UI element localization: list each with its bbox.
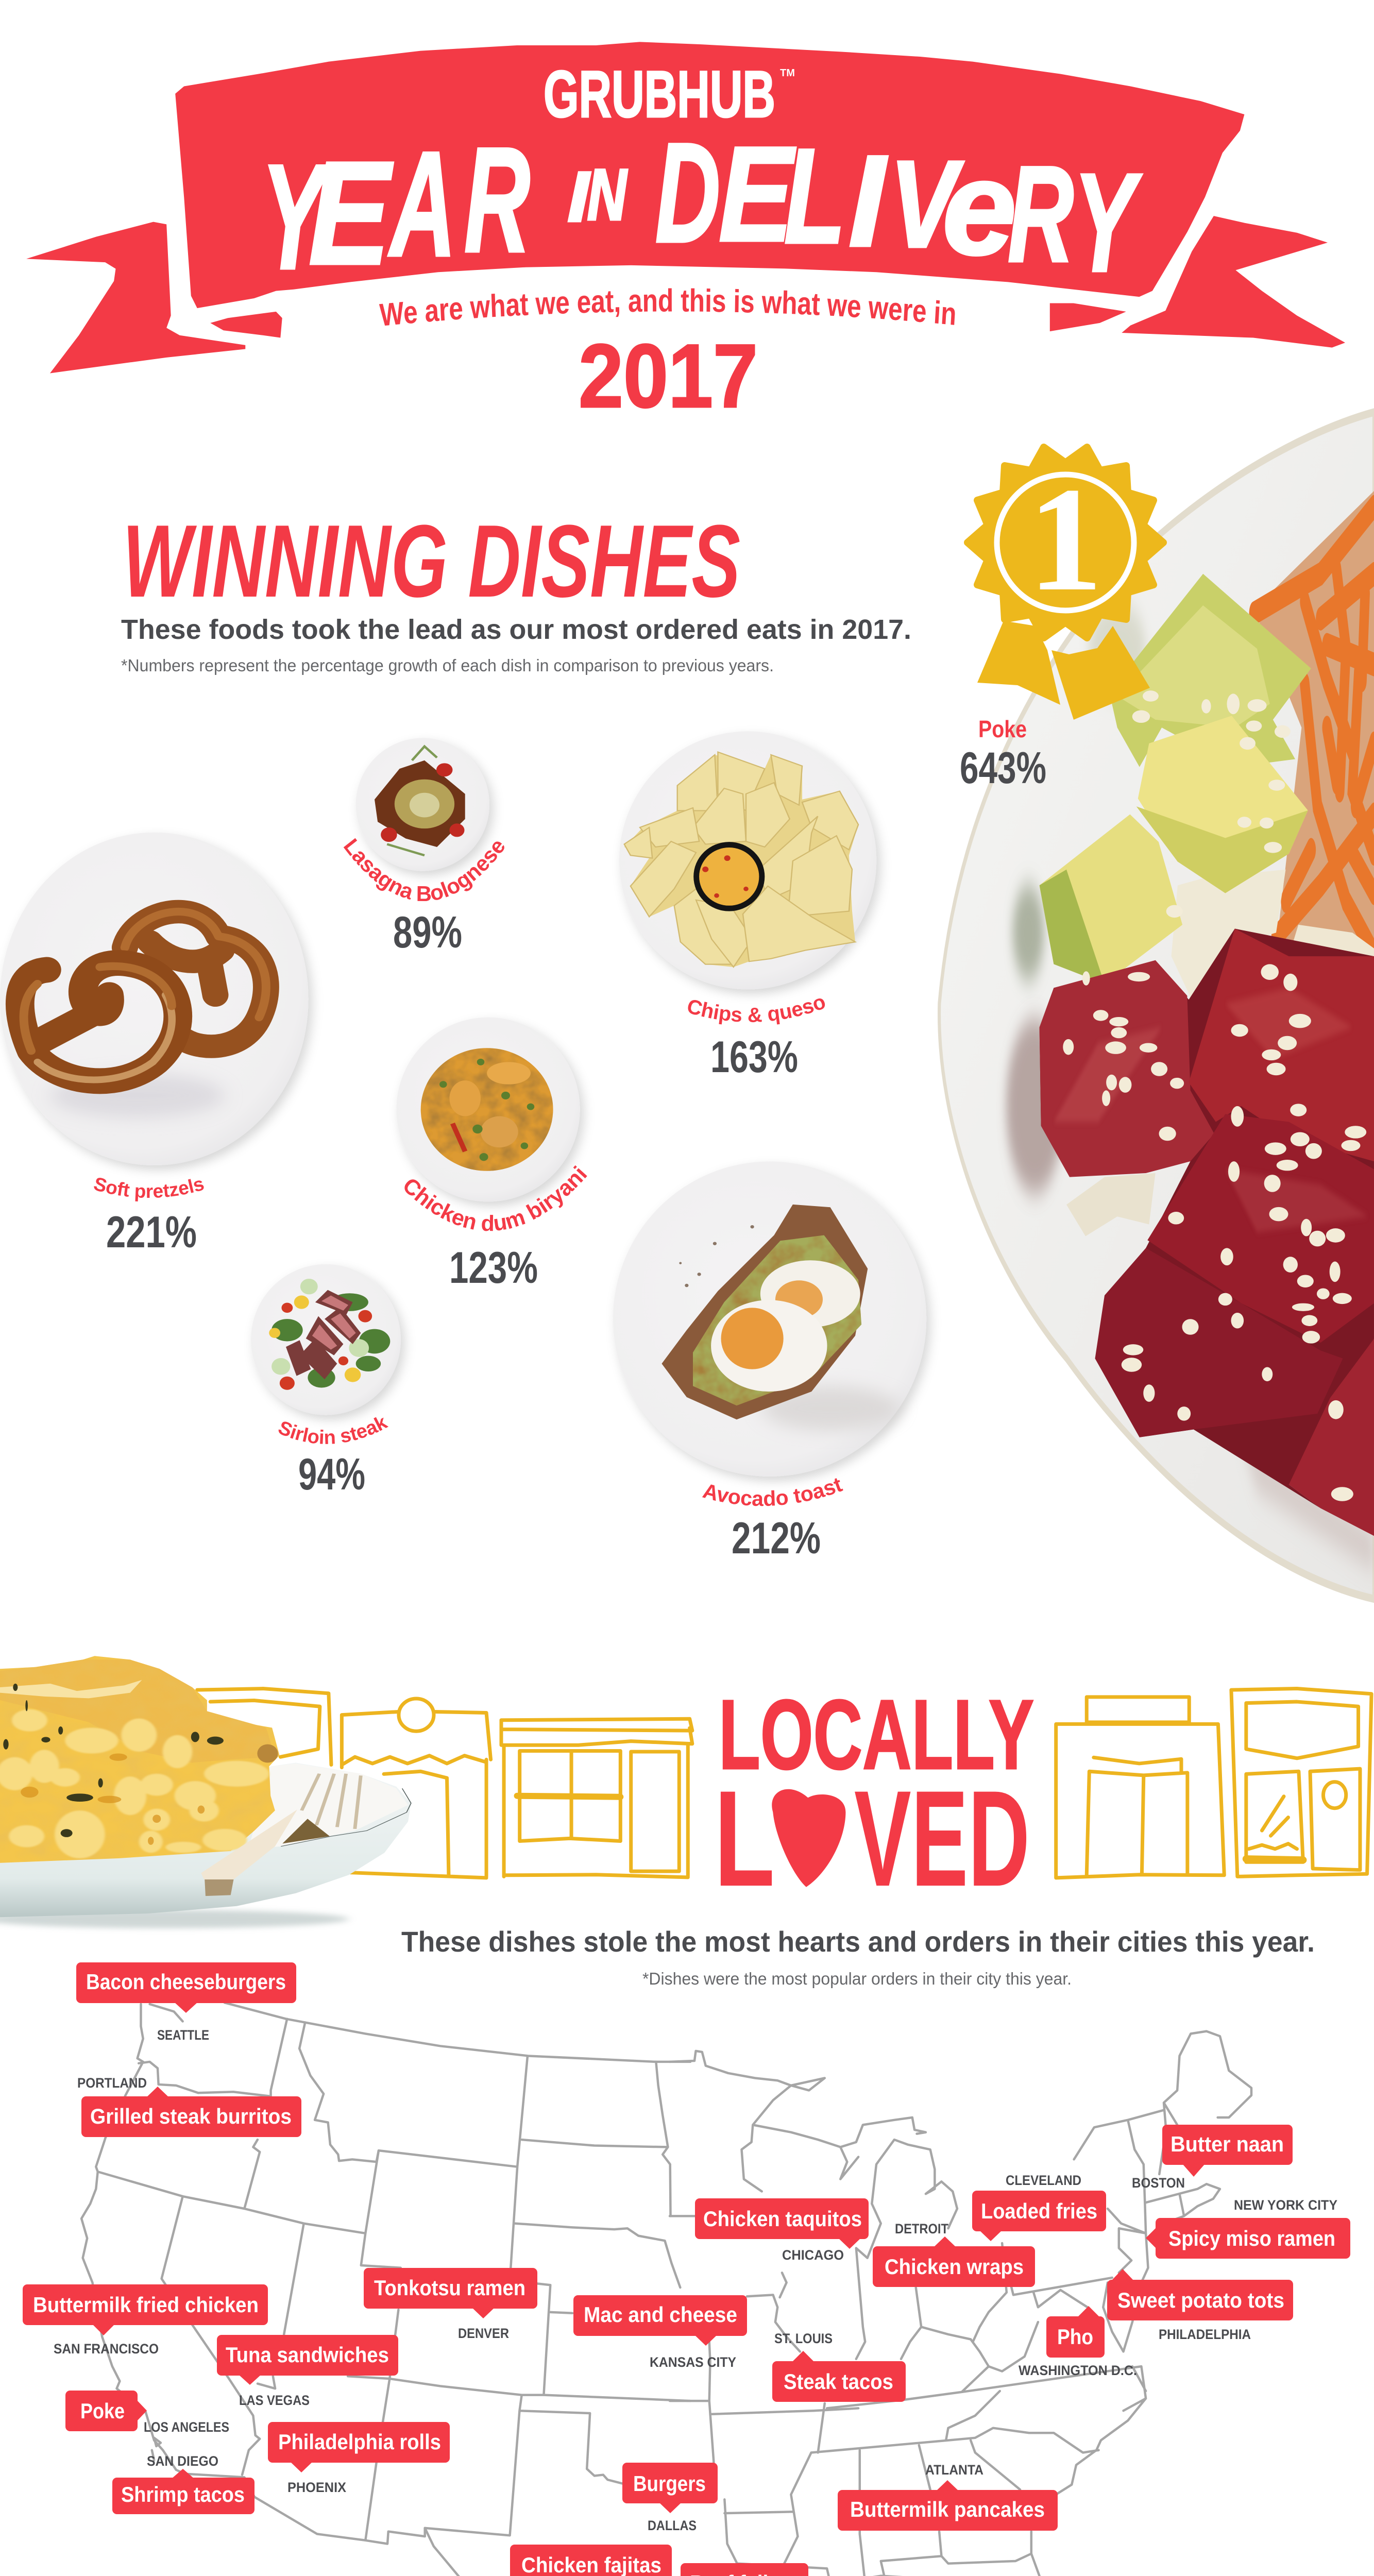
callout: San Francisco: Buttermilk fried chicken	[33, 2293, 259, 2317]
dish: sirloin steak: Sirloin steak	[278, 1417, 388, 1444]
title: Year in Delivery	[261, 114, 1143, 301]
heading: loved with heart: L	[714, 1762, 775, 1915]
dish: soft pretzels: Soft pretzels	[94, 1178, 204, 1201]
panel: locally loved header	[0, 1656, 1371, 1988]
carrots	[1254, 491, 1374, 960]
heading: loved with heart	[714, 1762, 1030, 1915]
storefront illustrations	[197, 1689, 1371, 1878]
year: 2017	[579, 326, 758, 427]
callout: Los Angeles: Poke	[80, 2399, 125, 2423]
dish: lasagna bolognese: Lasagna Bolognese	[343, 838, 504, 901]
bowl	[939, 412, 1374, 1599]
heading: loved with heart: O	[783, 1786, 840, 1884]
title: Year in Delivery: I	[568, 158, 590, 236]
city labels: PHOENIX	[287, 2480, 346, 2495]
callout: Dallas: Burgers	[633, 2471, 706, 2496]
icon: first place medal	[968, 447, 1163, 720]
city labels: SAN FRANCISCO	[54, 2341, 159, 2357]
dish: lasagna bolognese	[343, 738, 504, 957]
map: United States with local favorites	[23, 1962, 1350, 2576]
callout: Seattle	[76, 1962, 296, 2013]
city labels: CLEVELAND	[1006, 2173, 1081, 2188]
fork	[201, 1774, 361, 1896]
dish: poke	[960, 716, 1046, 793]
city labels: PORTLAND	[77, 2075, 147, 2091]
city labels: ATLANTA	[925, 2462, 983, 2478]
callout: Atlanta	[838, 2480, 1058, 2531]
callout: Las Vegas: Tuna sandwiches	[226, 2343, 389, 2367]
callout: St. Louis	[772, 2351, 906, 2402]
dish: chicken dum biryani: 123%	[449, 1243, 538, 1293]
rice	[1172, 870, 1286, 1004]
dish: lasagna bolognese: 89%	[393, 908, 462, 957]
city labels: KANSAS CITY	[650, 2354, 736, 2370]
callout: San Diego	[112, 2469, 255, 2514]
title: Year in Delivery: R	[464, 116, 530, 283]
dish: poke: 643%	[960, 743, 1046, 793]
title: Year in Delivery: D	[655, 114, 720, 272]
callout: Dallas	[622, 2463, 718, 2513]
callout: Washington D.C.: Pho	[1057, 2325, 1093, 2349]
title: Year in Delivery: R	[1008, 138, 1074, 291]
callout: Phoenix: Philadelphia rolls	[278, 2430, 441, 2454]
tagline: We are what we eat, and this is what we were in	[379, 289, 955, 326]
dish: poke: Poke	[978, 716, 1027, 742]
callout: Cleveland	[972, 2191, 1106, 2241]
city labels: NEW YORK CITY	[1234, 2197, 1337, 2213]
callout: Chicago	[695, 2198, 869, 2249]
city labels: PHILADELPHIA	[1159, 2327, 1251, 2342]
city labels: SEATTLE	[157, 2027, 209, 2043]
callout: Los Angeles	[65, 2391, 147, 2431]
photo: mac and cheese bowl	[0, 1656, 411, 1928]
dish: soft pretzels: 221%	[106, 1208, 197, 1257]
title: Year in Delivery: I	[849, 129, 888, 274]
callout: St. Louis: Steak tacos	[784, 2369, 893, 2394]
callout: Atlanta: Buttermilk pancakes	[850, 2497, 1045, 2521]
callout: Portland: Grilled steak burritos	[90, 2104, 292, 2128]
title: Year in Delivery: V	[890, 135, 964, 273]
city labels: CHICAGO	[782, 2247, 844, 2263]
dish: soft pretzels	[0, 833, 316, 1257]
city labels: WASHINGTON D.C.	[1019, 2363, 1137, 2378]
callout: Cleveland: Loaded fries	[981, 2199, 1097, 2223]
title: Year in Delivery: A	[387, 121, 456, 287]
city labels: ST. LOUIS	[774, 2331, 833, 2346]
tuna chunks	[1040, 929, 1374, 1536]
sesame seeds	[1063, 690, 1366, 1501]
callout: New York City	[1146, 2218, 1350, 2259]
panel: winning dishes	[0, 444, 1167, 1563]
city labels: DALLAS	[648, 2518, 697, 2533]
callout: Seattle: Bacon cheeseburgers	[86, 1970, 286, 1994]
callout: San Francisco	[23, 2284, 268, 2335]
callout: Philadelphia	[1107, 2269, 1293, 2320]
callout: Detroit: Chicken wraps	[885, 2255, 1024, 2279]
callout: Kansas City: Mac and cheese	[584, 2302, 737, 2327]
footnote: *Numbers represent the percentage growth of each dish in comparison to previous years.	[121, 656, 774, 675]
heading: winning dishes: WINNING DISHES	[123, 504, 740, 619]
city labels: SAN DIEGO	[147, 2453, 218, 2469]
logo: Grubhub: GRUBHUB	[544, 58, 775, 131]
dish: sirloin steak	[251, 1264, 401, 1499]
title: Year in Delivery: Y	[261, 133, 332, 300]
callout: Chicago: Chicken taquitos	[703, 2207, 862, 2231]
title: Year in Delivery: e	[942, 133, 1016, 283]
subheading: These dishes stole the most hearts and orders in their cities this year.	[401, 1925, 1315, 1958]
callout: Las Vegas	[217, 2335, 398, 2385]
dish: sirloin steak: 94%	[298, 1450, 365, 1499]
city labels	[54, 2027, 1337, 2576]
panel: poke bowl photo	[939, 412, 1374, 1599]
title: Year in Delivery: E	[719, 118, 797, 269]
callout: Philadelphia: Sweet potato tots	[1117, 2288, 1284, 2312]
city labels: DENVER	[458, 2326, 509, 2341]
icon: first place medal: 1	[1028, 456, 1102, 622]
city labels: LOS ANGELES	[144, 2419, 229, 2435]
callout: Boston: Butter naan	[1171, 2132, 1284, 2156]
city labels: BOSTON	[1132, 2175, 1185, 2191]
callout: Denver: Tonkotsu ramen	[374, 2276, 525, 2300]
callout: Washington D.C.	[1046, 2306, 1105, 2358]
callout: Phoenix	[268, 2422, 450, 2472]
footnote: *Dishes were the most popular orders in their city this year.	[642, 1969, 1072, 1988]
title: Year in Delivery: Y	[1074, 144, 1143, 301]
dish: avocado toast: 212%	[732, 1514, 821, 1563]
callout: Kansas City	[573, 2295, 747, 2346]
dish: avocado toast	[613, 1161, 926, 1563]
callout: New York City: Spicy miso ramen	[1168, 2226, 1335, 2250]
heading: locally: LOCALLY	[719, 1679, 1034, 1790]
callout: Portland	[81, 2087, 301, 2137]
dish: chicken dum biryani: Chicken dum biryani	[404, 1165, 587, 1231]
dish: chips and queso	[619, 732, 885, 1082]
callout: Detroit	[873, 2236, 1035, 2287]
logo: Grubhub: TM	[780, 67, 795, 79]
callout: Boston	[1162, 2125, 1293, 2177]
callout: Denver	[364, 2268, 537, 2318]
ribbon shape	[26, 42, 1345, 373]
dish: avocado toast: Avocado toast	[702, 1478, 843, 1506]
dish: chicken dum biryani	[396, 1018, 592, 1293]
city labels: DETROIT	[895, 2221, 948, 2236]
avocado cubes	[1040, 574, 1311, 984]
dish: chips and queso: 163%	[710, 1032, 798, 1082]
dish: chips and queso: Chips & queso	[688, 998, 825, 1024]
callout: San Diego: Shrimp tacos	[121, 2482, 245, 2506]
heading: loved with heart: VED	[854, 1762, 1030, 1915]
subheading: These foods took the lead as our most ordered eats in 2017.	[121, 614, 911, 645]
map outlines	[81, 2003, 1251, 2576]
header banner	[26, 42, 1345, 427]
callout: Austin	[510, 2545, 672, 2576]
title: Year in Delivery: N	[587, 154, 627, 235]
title: Year in Delivery: E	[309, 131, 395, 295]
callout: Houston	[681, 2563, 808, 2576]
title: Year in Delivery: L	[784, 121, 845, 272]
city labels: LAS VEGAS	[239, 2393, 310, 2408]
